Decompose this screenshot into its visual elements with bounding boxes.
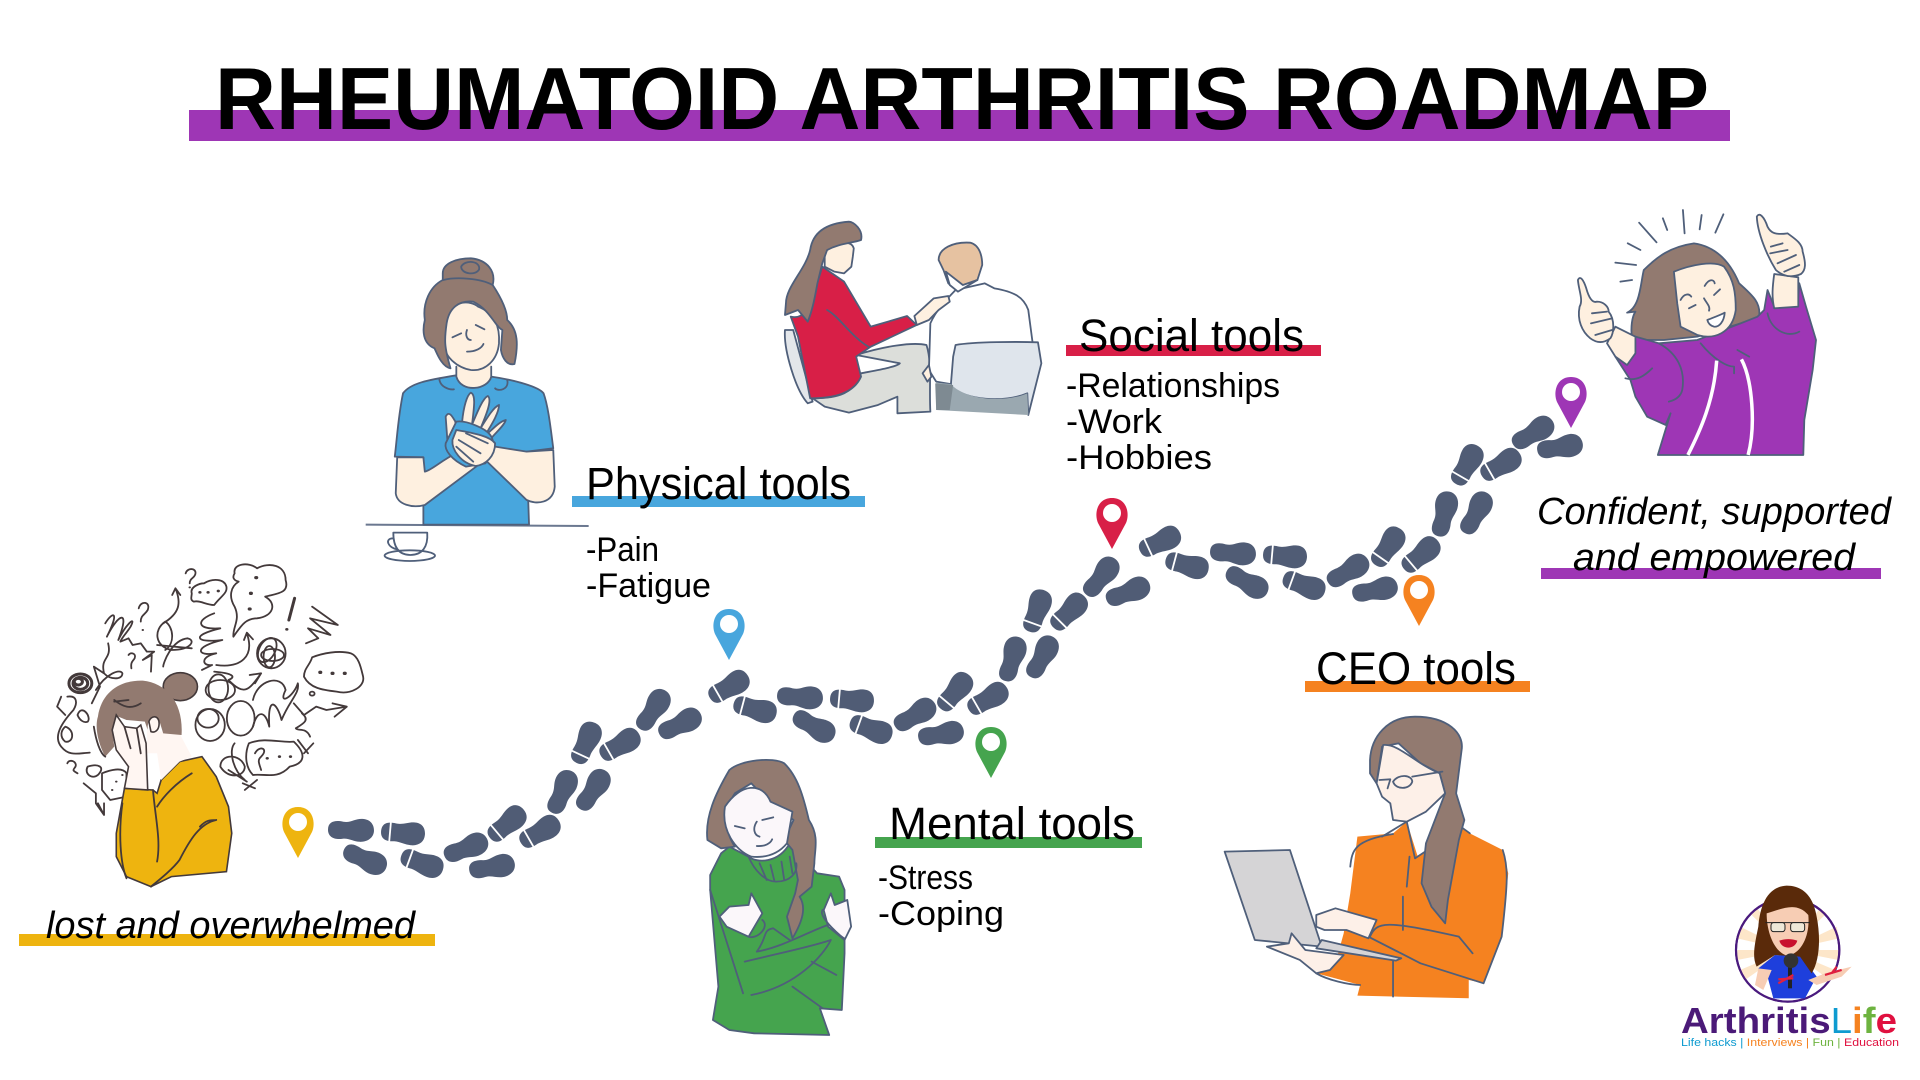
- heading: Mental tools: [889, 798, 1135, 849]
- hand on keys: [1316, 908, 1377, 938]
- hands: [719, 893, 762, 937]
- scribbles: [57, 564, 363, 815]
- sweater: [116, 757, 232, 887]
- collar: [749, 857, 796, 882]
- list: [878, 859, 1004, 933]
- hair: [97, 681, 182, 757]
- section: mental tools: [875, 798, 1142, 933]
- lower hand: [1267, 933, 1344, 973]
- cup and saucer: [385, 533, 435, 561]
- pin: green: [975, 727, 1007, 778]
- illustration: woman in green sweater hugging herself: [707, 760, 851, 1035]
- section: social tools: [1066, 310, 1321, 477]
- illustration: woman holding wrist: [366, 258, 589, 561]
- figure top: [1758, 955, 1817, 998]
- face: [1674, 264, 1736, 337]
- arms: [710, 890, 845, 1008]
- fingers: [446, 393, 506, 443]
- pin: orange: [1403, 575, 1435, 626]
- neck and hand: [147, 730, 192, 780]
- list: -Coping: [878, 895, 1004, 933]
- list: -Relationships: [1066, 367, 1280, 405]
- pin: yellow: [282, 807, 314, 858]
- sweater: [710, 843, 845, 1035]
- hair: [1754, 886, 1819, 973]
- laptop: [1225, 850, 1322, 947]
- pin: purple: [1555, 377, 1587, 428]
- pin: blue: [713, 609, 745, 660]
- section: CEO tools heading: CEO tools: [1316, 643, 1516, 694]
- bun: [163, 673, 197, 701]
- hand: [452, 430, 495, 466]
- hair: [707, 760, 816, 938]
- left chair: [785, 330, 813, 403]
- list: [586, 531, 711, 605]
- man's head: [939, 243, 982, 288]
- list: [1066, 367, 1280, 477]
- arms: [396, 453, 481, 506]
- right arm and hand: [1773, 274, 1798, 308]
- face woman: [825, 243, 854, 273]
- red sweater: [791, 267, 917, 398]
- logo portrait: [1736, 886, 1852, 1002]
- shirt: [395, 375, 553, 525]
- hair: [424, 258, 517, 368]
- table line: [366, 525, 589, 526]
- logo wordmark: Arthritis Life: [1681, 1000, 1897, 1041]
- text: confident, supported and empowered: Confident, supported: [1537, 491, 1893, 533]
- list: -Stress: [878, 859, 973, 897]
- illustration: woman in orange shirt with laptop: [1225, 717, 1508, 998]
- bracelets: [1778, 967, 1842, 983]
- logo tagline: Life hacks | Interviews | Fun | Education: [1681, 1037, 1899, 1049]
- text: confident, supported and empowered: [1537, 491, 1893, 579]
- woman's trousers: [813, 344, 930, 413]
- text: confident, supported and empowered: and empowered: [1573, 537, 1857, 579]
- neck: [456, 357, 491, 388]
- face: [724, 788, 792, 857]
- list: -Work: [1066, 403, 1163, 441]
- pin: red: [1096, 498, 1128, 549]
- left arm and hand: [1607, 327, 1635, 365]
- chair back: [951, 342, 1041, 415]
- face: [1767, 907, 1809, 956]
- glasses: [1379, 772, 1442, 788]
- list: -Hobbies: [1066, 439, 1212, 477]
- woman's hand: [914, 296, 950, 325]
- text: lost and overwhelmed: lost and overwhelmed: [46, 905, 417, 947]
- shirt: [1316, 822, 1508, 998]
- illustration: overwhelmed woman with scribbles: [57, 564, 363, 887]
- illustration: two people sitting, hand on shoulder: [785, 222, 1041, 415]
- section: physical tools: [572, 458, 865, 605]
- list: -Fatigue: [586, 567, 711, 605]
- heading: Physical tools: [586, 458, 851, 509]
- title: RHEUMATOID ARTHRITIS ROADMAP: [215, 49, 1709, 148]
- hair: [1370, 717, 1464, 923]
- rays: [1615, 210, 1723, 282]
- face: [444, 302, 499, 370]
- logo: Arthritis Life: [1681, 886, 1899, 1049]
- glove: [445, 421, 493, 467]
- illustration: happy woman in purple hoodie with thumbs up: [1578, 210, 1816, 455]
- hoodie: [1615, 283, 1816, 455]
- heading: Social tools: [1079, 310, 1304, 361]
- footprints path: [328, 412, 1584, 882]
- hair woman: [785, 222, 861, 322]
- man's pants: [936, 383, 1028, 415]
- face: [1377, 745, 1445, 822]
- list: -Pain: [586, 531, 659, 569]
- microphone: [1788, 967, 1792, 988]
- hair: [1627, 243, 1759, 340]
